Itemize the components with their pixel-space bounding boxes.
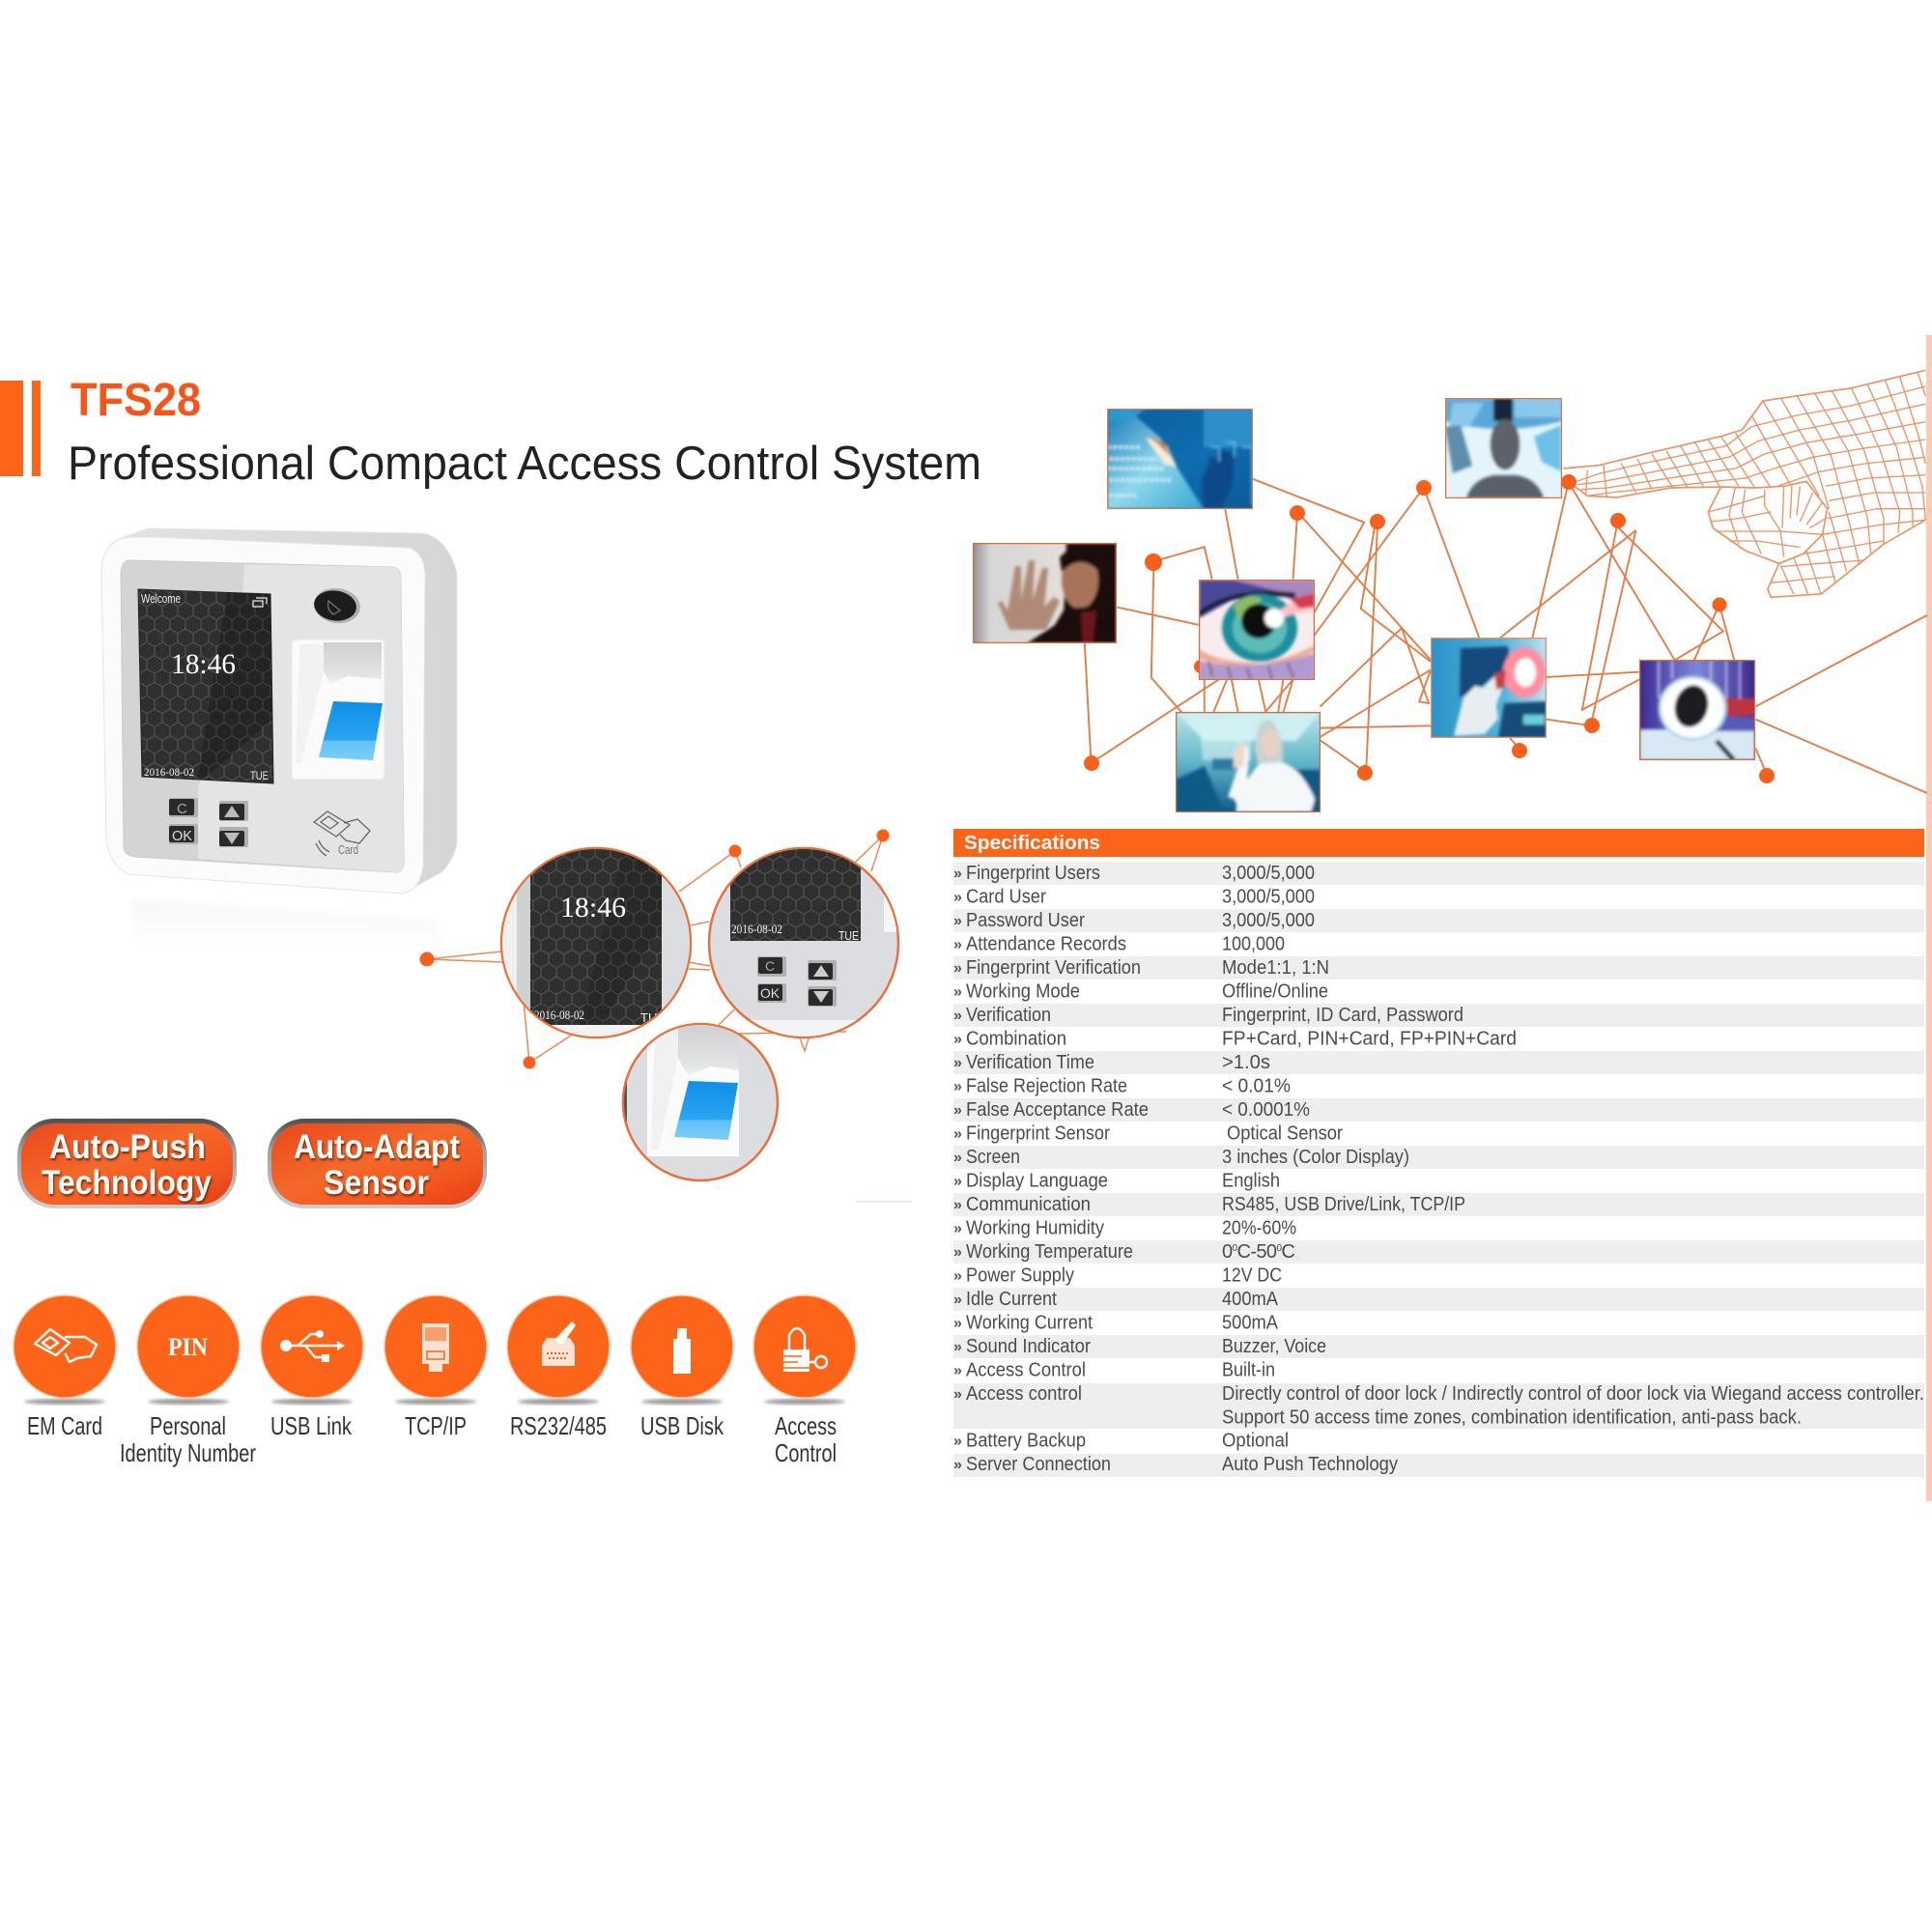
network connector lines: [1085, 479, 1927, 793]
photo: hand and face: [973, 543, 1117, 643]
feature: Access Control: [753, 1295, 856, 1467]
feature: EM Card: EM Card: [27, 1411, 102, 1440]
row: Idle Current: 400mA: [1222, 1289, 1279, 1310]
faint divider: [856, 1201, 912, 1202]
row: Fingerprint Sensor: Fingerprint Sensor: [966, 1122, 1110, 1144]
device screen: TUE: [250, 769, 269, 782]
row: Attendance Records: Attendance Records: [966, 933, 1126, 954]
row: Password User: »: [953, 913, 962, 929]
row: Fingerprint Verification: Mode1:1, 1:N: [1222, 957, 1329, 979]
row: False Rejection Rate: False Rejection Rate: [966, 1076, 1127, 1097]
callout connector lines: [427, 836, 883, 1063]
row: Working Humidity: »: [953, 1221, 962, 1236]
fingerprint sensor: [292, 639, 384, 780]
device screen: 2016-08-02: [144, 765, 194, 779]
row: Screen: »: [953, 1150, 962, 1166]
card reader mark: Card: [338, 843, 358, 857]
photo: eye: [1199, 580, 1315, 680]
row: Attendance Records: [953, 933, 1285, 954]
row: Working Mode: Offline/Online: [1222, 981, 1328, 1003]
row: Fingerprint Verification: Fingerprint Verification: [966, 957, 1141, 979]
row: Card User: »: [953, 889, 962, 906]
row: False Acceptance Rate: False Acceptance Rate: [966, 1099, 1149, 1121]
row: Sound Indicator: [953, 1335, 1924, 1358]
table header: [953, 829, 1924, 857]
row: Working Humidity: Working Humidity: [966, 1217, 1104, 1238]
row: Fingerprint Users: »: [953, 866, 962, 882]
row: Fingerprint Users: Fingerprint Users: [966, 863, 1100, 884]
row: Server Connection: [953, 1454, 1924, 1477]
product: access control device: [101, 528, 457, 894]
row: Working Mode: Working Mode: [966, 981, 1080, 1003]
row: Working Temperature: [953, 1240, 1924, 1264]
row: False Rejection Rate: [953, 1076, 1291, 1097]
keypad: [169, 798, 248, 847]
row: Fingerprint Sensor: [953, 1122, 1343, 1144]
row: Display Language: Display Language: [966, 1171, 1108, 1192]
row: Working Temperature: »: [953, 1244, 962, 1261]
specifications table: [953, 829, 1924, 1477]
photo: fingerprint magnifier: [1639, 660, 1755, 760]
row: Battery Backup: Optional: [1222, 1430, 1289, 1451]
feature: Personal Identity Number: PIN: [168, 1333, 208, 1361]
zoom circle: keypad: C: [765, 958, 775, 974]
row: Server Connection: Auto Push Technology: [1222, 1454, 1398, 1475]
model name: TFS28: [71, 375, 201, 426]
row: Access control detail: [953, 1383, 1924, 1429]
device screen: 18:46: [171, 648, 236, 680]
row: Access Control: Access Control: [966, 1360, 1086, 1381]
zoom circle: keypad: TUE: [838, 928, 859, 943]
row: Card User: Card User: [966, 887, 1046, 908]
feature: RS232/485: RS232/485: [510, 1411, 607, 1440]
zoom circle: fingerprint sensor: [622, 1019, 778, 1180]
row: Battery Backup: »: [953, 1434, 962, 1449]
feature: USB Disk: [631, 1295, 733, 1440]
dot hidden behind eye photo: [1194, 660, 1208, 673]
row: Working Current: »: [953, 1316, 962, 1331]
row: False Acceptance Rate: [953, 1098, 1924, 1122]
row: Verification: [953, 1004, 1924, 1027]
row: Attendance Records: »: [953, 937, 962, 952]
feature: Personal Identity Number: Identity Number: [120, 1438, 256, 1467]
row: Server Connection: »: [953, 1457, 962, 1473]
row: Working Temperature: C: [1281, 1241, 1294, 1263]
row: Verification Time: Verification Time: [966, 1052, 1094, 1073]
row: Verification Time: >1.0s: [1222, 1052, 1270, 1073]
row: Working Current: 500mA: [1222, 1312, 1279, 1333]
feature: Personal Identity Number: [120, 1295, 256, 1467]
right edge strip: [1926, 335, 1932, 1501]
row: Battery Backup: [953, 1430, 1289, 1451]
photo: hand on tablet: [1431, 638, 1547, 738]
card reader mark: [314, 811, 370, 857]
header accent bars: [0, 381, 41, 476]
row: Working Temperature: 0: [1276, 1243, 1282, 1254]
row: Power Supply: Power Supply: [966, 1265, 1074, 1287]
row: Power Supply: [953, 1265, 1282, 1287]
row: Server Connection: Server Connection: [966, 1454, 1111, 1475]
row: Fingerprint Verification: »: [953, 960, 962, 977]
zoom circle: keypad: OK: [760, 985, 781, 1001]
row: False Acceptance Rate: < 0.0001%: [1222, 1099, 1310, 1121]
row: Idle Current: »: [953, 1292, 962, 1308]
row: Screen: Screen: [966, 1147, 1020, 1168]
title: Professional Compact Access Control System: [68, 438, 981, 490]
row: Communication: »: [953, 1197, 962, 1213]
photo: blue hand scan: [1107, 409, 1253, 509]
row: Working Current: [953, 1312, 1279, 1333]
row: Fingerprint Users: 3,000/5,000: [1222, 863, 1315, 884]
row: Combination: FP+Card, PIN+Card, FP+PIN+Card: [1222, 1028, 1517, 1049]
row: Verification: »: [953, 1008, 962, 1024]
row: Working Temperature: 0: [1222, 1241, 1233, 1263]
row: Combination: Combination: [966, 1028, 1066, 1049]
badge: Auto-Adapt Sensor: Sensor: [324, 1164, 429, 1202]
row: Working Humidity: 20%-60%: [1222, 1217, 1296, 1238]
row: Sound Indicator: Buzzer, Voice: [1222, 1336, 1326, 1357]
zoom circle: keypad: 2016-08-02: [731, 922, 782, 936]
row: Access Control: Built-in: [1222, 1360, 1275, 1381]
row: Sound Indicator: »: [953, 1339, 962, 1355]
photo: head scan: [1445, 398, 1562, 498]
row: Battery Backup: Battery Backup: [966, 1430, 1086, 1451]
device screen: [138, 589, 273, 783]
row: Idle Current: [953, 1288, 1924, 1311]
device reflection: [130, 898, 449, 952]
row: Verification: Verification: [966, 1005, 1051, 1026]
zoom circle: screen: 18:46: [560, 892, 626, 923]
badge: Auto-Push Technology: Technology: [42, 1164, 212, 1202]
row: Combination: [953, 1028, 1517, 1049]
row: Communication: Communication: [966, 1194, 1091, 1215]
keypad: C: [177, 801, 187, 817]
row: Verification: Fingerprint, ID Card, Password: [1222, 1005, 1463, 1026]
row: Card User: 3,000/5,000: [1222, 887, 1315, 908]
row: Password User: Password User: [966, 910, 1085, 931]
feature: RS232/485: [507, 1295, 610, 1440]
row: Access control detail: Support 50 access time zones, combination identification, anti-pass back.: [1222, 1406, 1802, 1428]
keypad: OK: [172, 828, 192, 844]
zoom circle: screen: TUE: [640, 1010, 666, 1025]
feature: USB Link: [261, 1295, 363, 1440]
zoom circle: keypad: [709, 840, 902, 1043]
device screen: Welcome: [141, 591, 181, 606]
photo: woman at interface: [1176, 712, 1321, 812]
row: Attendance Records: 100,000: [1222, 933, 1285, 954]
row: Working Temperature: 0: [1233, 1243, 1238, 1254]
feature: USB Disk: USB Disk: [640, 1411, 724, 1440]
row: Fingerprint Sensor: »: [953, 1126, 962, 1142]
row: Working Mode: [953, 981, 1328, 1003]
row: False Rejection Rate: < 0.01%: [1222, 1076, 1291, 1097]
feature: TCP/IP: TCP/IP: [405, 1411, 467, 1440]
callout dots: [419, 829, 889, 1068]
row: Sound Indicator: Sound Indicator: [966, 1336, 1091, 1357]
feature: Access Control: Control: [775, 1438, 837, 1467]
row: Combination: »: [953, 1032, 962, 1047]
row: Access Control: [953, 1360, 1275, 1381]
feature: USB Link: USB Link: [270, 1411, 353, 1440]
row: Verification Time: »: [953, 1055, 962, 1071]
feature: Access Control: Access: [775, 1411, 837, 1440]
zoom circle: screen: 2016-08-02: [534, 1008, 584, 1022]
row: Display Language: »: [953, 1173, 962, 1190]
row: Access control detail: »: [953, 1386, 962, 1403]
badge: Auto-Push Technology: Auto-Push: [49, 1128, 206, 1166]
row: Access Control: »: [953, 1362, 962, 1379]
row: False Rejection Rate: »: [953, 1078, 962, 1095]
row: Fingerprint Users: [953, 862, 1924, 885]
feature: TCP/IP: [384, 1295, 487, 1440]
row: Fingerprint Verification: [953, 956, 1924, 980]
row: Password User: 3,000/5,000: [1222, 910, 1315, 931]
row: Communication: RS485, USB Drive/Link, TCP/IP: [1222, 1194, 1465, 1215]
row: Screen: [953, 1146, 1924, 1169]
row: Card User: [953, 887, 1315, 908]
wireframe hand: [1563, 370, 1925, 597]
row: Working Humidity: [953, 1217, 1296, 1238]
row: Working Temperature: Working Temperature: [966, 1241, 1133, 1263]
row: Display Language: [953, 1171, 1280, 1192]
table header: Specifications: [964, 833, 1100, 854]
row: Verification Time: [953, 1051, 1924, 1074]
row: Communication: [953, 1193, 1924, 1216]
row: False Acceptance Rate: »: [953, 1102, 962, 1119]
zoom circle: screen: [501, 840, 696, 1044]
badge: Auto-Adapt Sensor: [268, 1119, 487, 1208]
row: Power Supply: »: [953, 1267, 962, 1285]
badge: Auto-Adapt Sensor: Auto-Adapt: [294, 1128, 460, 1166]
row: Working Mode: »: [953, 983, 962, 1001]
row: Screen: 3 inches (Color Display): [1222, 1147, 1409, 1168]
feature: Personal Identity Number: Personal: [150, 1411, 226, 1440]
row: Display Language: English: [1222, 1171, 1280, 1192]
feature: EM Card: [14, 1295, 116, 1440]
row: Password User: [953, 909, 1924, 932]
door bell button: [312, 585, 362, 626]
network dots: [1084, 474, 1775, 783]
row: Power Supply: 12V DC: [1222, 1265, 1282, 1287]
row: Working Current: Working Current: [966, 1312, 1093, 1333]
badge: Auto-Push Technology: [17, 1119, 237, 1208]
row: Fingerprint Sensor: Optical Sensor: [1227, 1122, 1343, 1144]
row: Access control detail: Access control: [966, 1383, 1082, 1405]
row: Working Temperature: C-50: [1236, 1241, 1277, 1263]
row: Idle Current: Idle Current: [966, 1289, 1057, 1310]
